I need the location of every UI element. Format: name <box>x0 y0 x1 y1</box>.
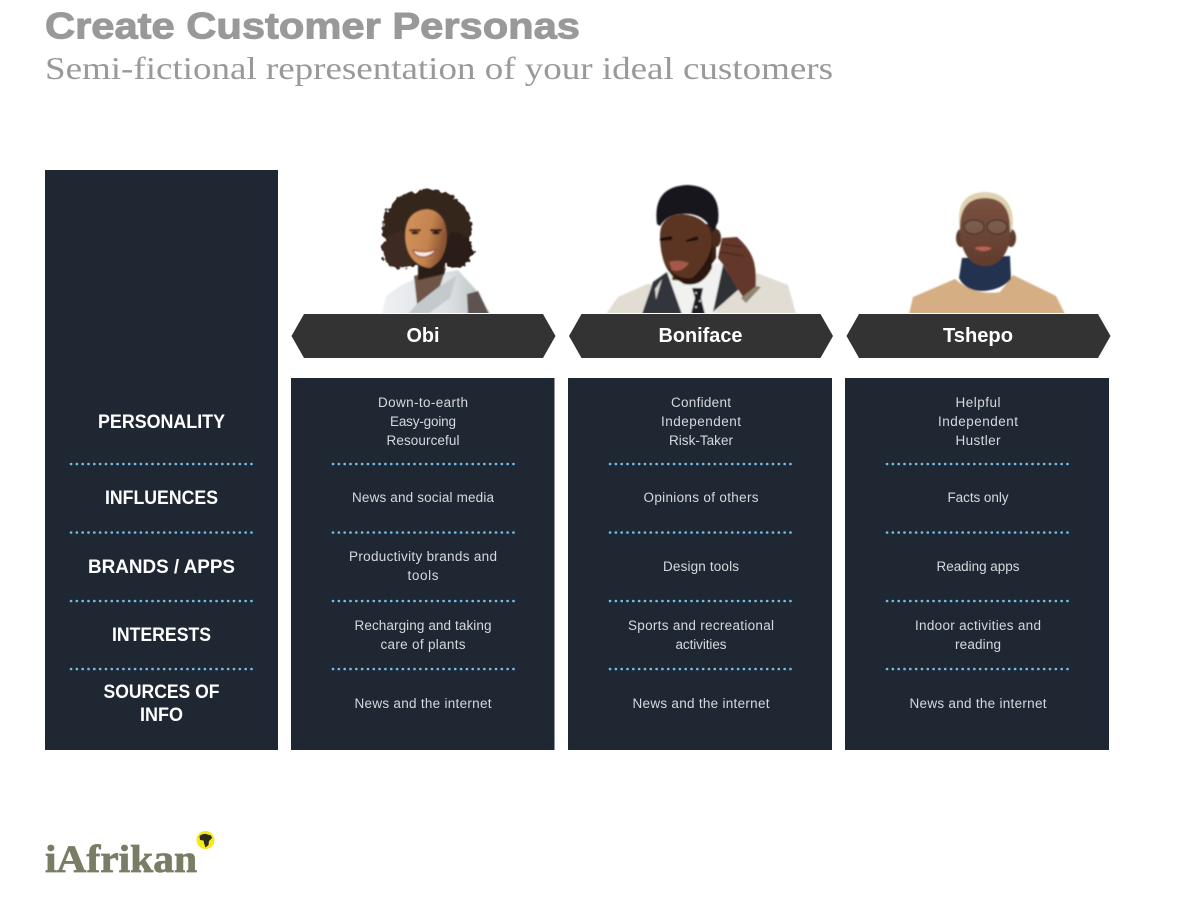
text: brands <box>349 549 497 583</box>
text: interests: reading <box>955 637 1001 652</box>
portrait: Tshepo <box>909 192 1065 314</box>
panel: Obi details <box>291 378 554 750</box>
text: personality: Independent <box>661 414 741 429</box>
text: sources: News and the internet <box>632 696 770 711</box>
text: influences: Opinions of others <box>644 490 759 505</box>
title: Create Customer Personas <box>45 4 580 46</box>
subtitle: Semi-fictional representation of your ideal customers <box>45 50 833 86</box>
ribbon: Boniface <box>569 314 833 358</box>
text: personality: Down-to-earth <box>378 395 468 410</box>
heading: personality: PERSONALITY <box>98 412 225 433</box>
panel: Boniface details <box>568 378 832 750</box>
heading: brands and apps: BRANDS / APPS <box>88 557 235 578</box>
text: interests: Sports and recreational <box>628 618 774 633</box>
text: sources: News and the internet <box>910 696 1047 711</box>
text: interests: activities <box>676 637 727 652</box>
text: brands: Reading apps <box>936 559 1020 574</box>
panel: Tshepo details <box>845 378 1109 750</box>
portrait: Obi <box>382 190 490 314</box>
text: influences: Facts only <box>948 490 1009 505</box>
text: interests: Indoor activities and <box>915 618 1041 633</box>
text: interests: care of plants <box>380 637 466 652</box>
panel: row labels <box>45 170 278 750</box>
heading: sources of info <box>104 682 220 726</box>
text: interests <box>915 618 1041 652</box>
text: sources: News and the internet <box>354 696 492 711</box>
text: personality: Risk-Taker <box>669 433 734 448</box>
portrait: Boniface <box>606 185 796 314</box>
icon: africa globe <box>196 831 214 849</box>
heading: interests: INTERESTS <box>112 625 211 646</box>
text: personality <box>661 395 741 448</box>
ribbon: Tshepo: Tshepo <box>943 325 1013 347</box>
text: personality: Easy-going <box>390 414 456 429</box>
ribbon: Tshepo <box>846 314 1110 358</box>
text: personality <box>378 395 468 448</box>
text: personality: Independent <box>938 414 1018 429</box>
text: brands: Design tools <box>663 559 739 574</box>
text: interests <box>354 618 492 652</box>
text: brands: tools <box>408 568 439 583</box>
text: interests: Recharging and taking <box>354 618 492 633</box>
ribbon: Boniface: Boniface <box>658 325 742 347</box>
heading: influences: INFLUENCES <box>105 488 218 509</box>
logo: iAfrikan: iAfrikan <box>45 838 197 881</box>
text: personality: Confident <box>671 395 731 410</box>
text: personality <box>938 395 1018 448</box>
text: brands: Productivity brands and <box>349 549 497 564</box>
ribbon: Obi <box>292 314 556 358</box>
text: personality: Hustler <box>956 433 1001 448</box>
heading: sources of info: SOURCES OF <box>104 682 220 703</box>
text: personality: Helpful <box>956 395 1000 410</box>
heading: sources of info: INFO <box>140 705 183 726</box>
text: influences: News and social media <box>352 490 494 505</box>
ribbon: Obi: Obi <box>406 325 440 347</box>
text: personality: Resourceful <box>386 433 460 448</box>
text: interests <box>628 618 774 652</box>
